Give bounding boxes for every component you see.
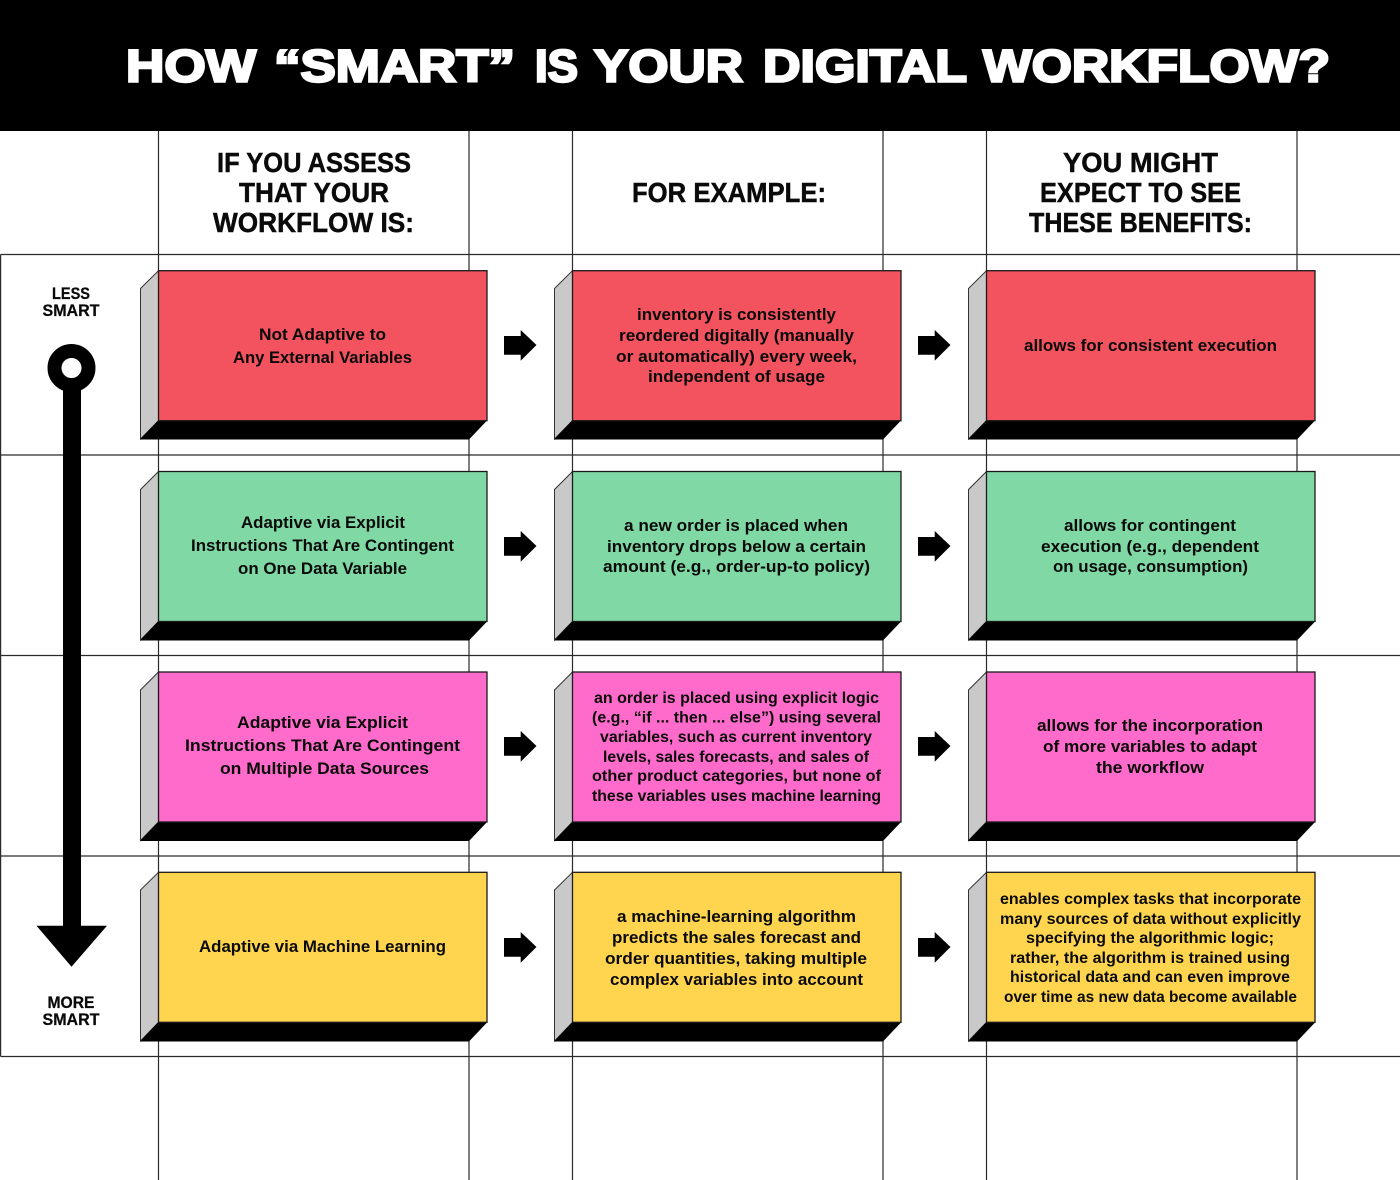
column heading: assess: IF YOU ASSESS [217, 147, 411, 178]
box: machine learning [140, 872, 488, 1042]
title: IS [535, 40, 578, 92]
box: order-up-to example: inventory drops below a certain [607, 537, 866, 556]
arrow [918, 932, 950, 963]
box: one data variable: on One Data Variable [238, 559, 407, 578]
box: machine-learning algorithm example: order quantities, taking multiple [605, 949, 867, 968]
box: more variables benefit [968, 672, 1316, 841]
box: complex tasks benefit: enables complex tasks that incorporate [1000, 891, 1301, 908]
arrow [918, 330, 950, 361]
box: one data variable: Instructions That Are Contingent [191, 536, 454, 555]
label: less smart: SMART [42, 302, 100, 320]
column heading: benefits: THESE BENEFITS: [1029, 207, 1252, 238]
box: complex tasks benefit: specifying the algorithmic logic; [1026, 930, 1274, 947]
smartness scale [36, 285, 107, 1029]
box: explicit logic example: (e.g., “if ... then ... else”) using several [592, 710, 881, 726]
label: less smart [42, 285, 100, 320]
box: weekly reorder example: inventory is consistently [637, 305, 837, 324]
box: weekly reorder example [554, 271, 902, 440]
column heading: benefits: EXPECT TO SEE [1040, 177, 1241, 208]
label: more smart: MORE [48, 994, 94, 1012]
label: less smart: LESS [52, 285, 90, 303]
box: explicit logic example: an order is placed using explicit logic [594, 690, 879, 707]
column heading: assess: WORKFLOW IS: [213, 207, 414, 238]
arrow [918, 731, 950, 762]
box: multiple data sources: on Multiple Data Sources [220, 759, 429, 778]
box: one data variable: Adaptive via Explicit [241, 513, 405, 532]
arrow [504, 932, 536, 963]
title banner [0, 0, 1400, 131]
box: explicit logic example: these variables uses machine learning [592, 788, 881, 805]
title: YOUR [594, 40, 743, 92]
box: more variables benefit: allows for the incorporation [1037, 716, 1263, 735]
title: HOW [126, 40, 257, 92]
box: explicit logic example [554, 672, 902, 841]
label: more smart [42, 994, 100, 1029]
box: multiple data sources: Adaptive via Explicit [237, 713, 408, 732]
box: order-up-to example: a new order is placed when [624, 516, 848, 535]
box: weekly reorder example: or automatically) every week, [616, 347, 857, 366]
box: complex tasks benefit: over time as new data become available [1004, 989, 1297, 1006]
column heading: benefits [1029, 147, 1252, 238]
box: explicit logic example: levels, sales forecasts, and sales of [603, 749, 870, 766]
box: contingent execution benefit: on usage, consumption) [1053, 557, 1248, 576]
title: WORKFLOW? [983, 40, 1330, 92]
box: order-up-to example [554, 472, 902, 640]
vertical arrow [36, 351, 107, 967]
box: consistent execution benefit: allows for consistent execution [1024, 336, 1277, 355]
box: more variables benefit: the workflow [1096, 758, 1205, 777]
box: not adaptive [140, 271, 488, 440]
box: machine-learning algorithm example: complex variables into account [610, 970, 863, 989]
box: machine-learning algorithm example: a machine-learning algorithm [617, 907, 856, 926]
label: more smart: SMART [42, 1011, 100, 1029]
box: complex tasks benefit: historical data and can even improve [1010, 969, 1290, 986]
box: explicit logic example: variables, such as current inventory [600, 729, 872, 746]
arrow [918, 531, 950, 562]
title [126, 40, 1330, 92]
box: machine-learning algorithm example: predicts the sales forecast and [612, 928, 861, 947]
box: complex tasks benefit: many sources of data without explicitly [1000, 911, 1301, 928]
box: order-up-to example: amount (e.g., order-up-to policy) [603, 557, 870, 576]
box: contingent execution benefit [968, 472, 1316, 640]
box: multiple data sources: Instructions That Are Contingent [185, 736, 460, 755]
title: “SMART” [274, 40, 515, 92]
arrow [504, 330, 536, 361]
box: one data variable [140, 472, 488, 640]
box: explicit logic example: other product categories, but none of [592, 768, 882, 785]
box: multiple data sources [140, 672, 488, 841]
box: contingent execution benefit: allows for contingent [1064, 516, 1236, 535]
arrow [504, 731, 536, 762]
box: not adaptive: Not Adaptive to [259, 325, 386, 344]
row 2: one data variable [140, 472, 1316, 640]
box: complex tasks benefit: rather, the algorithm is trained using [1010, 950, 1290, 967]
column heading: assess [213, 147, 414, 238]
box: weekly reorder example: independent of usage [648, 367, 825, 386]
row 4: machine learning [140, 872, 1316, 1042]
box: consistent execution benefit [968, 271, 1316, 440]
column heading: assess: THAT YOUR [239, 177, 389, 208]
title: DIGITAL [763, 40, 967, 92]
column heading: example: FOR EXAMPLE: [632, 177, 826, 208]
box: not adaptive: Any External Variables [233, 348, 412, 367]
box: machine learning: Adaptive via Machine Learning [199, 937, 446, 956]
box: weekly reorder example: reordered digitally (manually [619, 326, 855, 345]
box: complex tasks benefit [968, 872, 1316, 1042]
box: contingent execution benefit: execution (e.g., dependent [1041, 537, 1259, 556]
row 1: not adaptive [140, 271, 1316, 440]
column heading: benefits: YOU MIGHT [1063, 147, 1218, 178]
box: machine-learning algorithm example [554, 872, 902, 1042]
box: more variables benefit: of more variables to adapt [1043, 737, 1257, 756]
arrow [504, 531, 536, 562]
row 3: multiple data sources [140, 672, 1316, 841]
